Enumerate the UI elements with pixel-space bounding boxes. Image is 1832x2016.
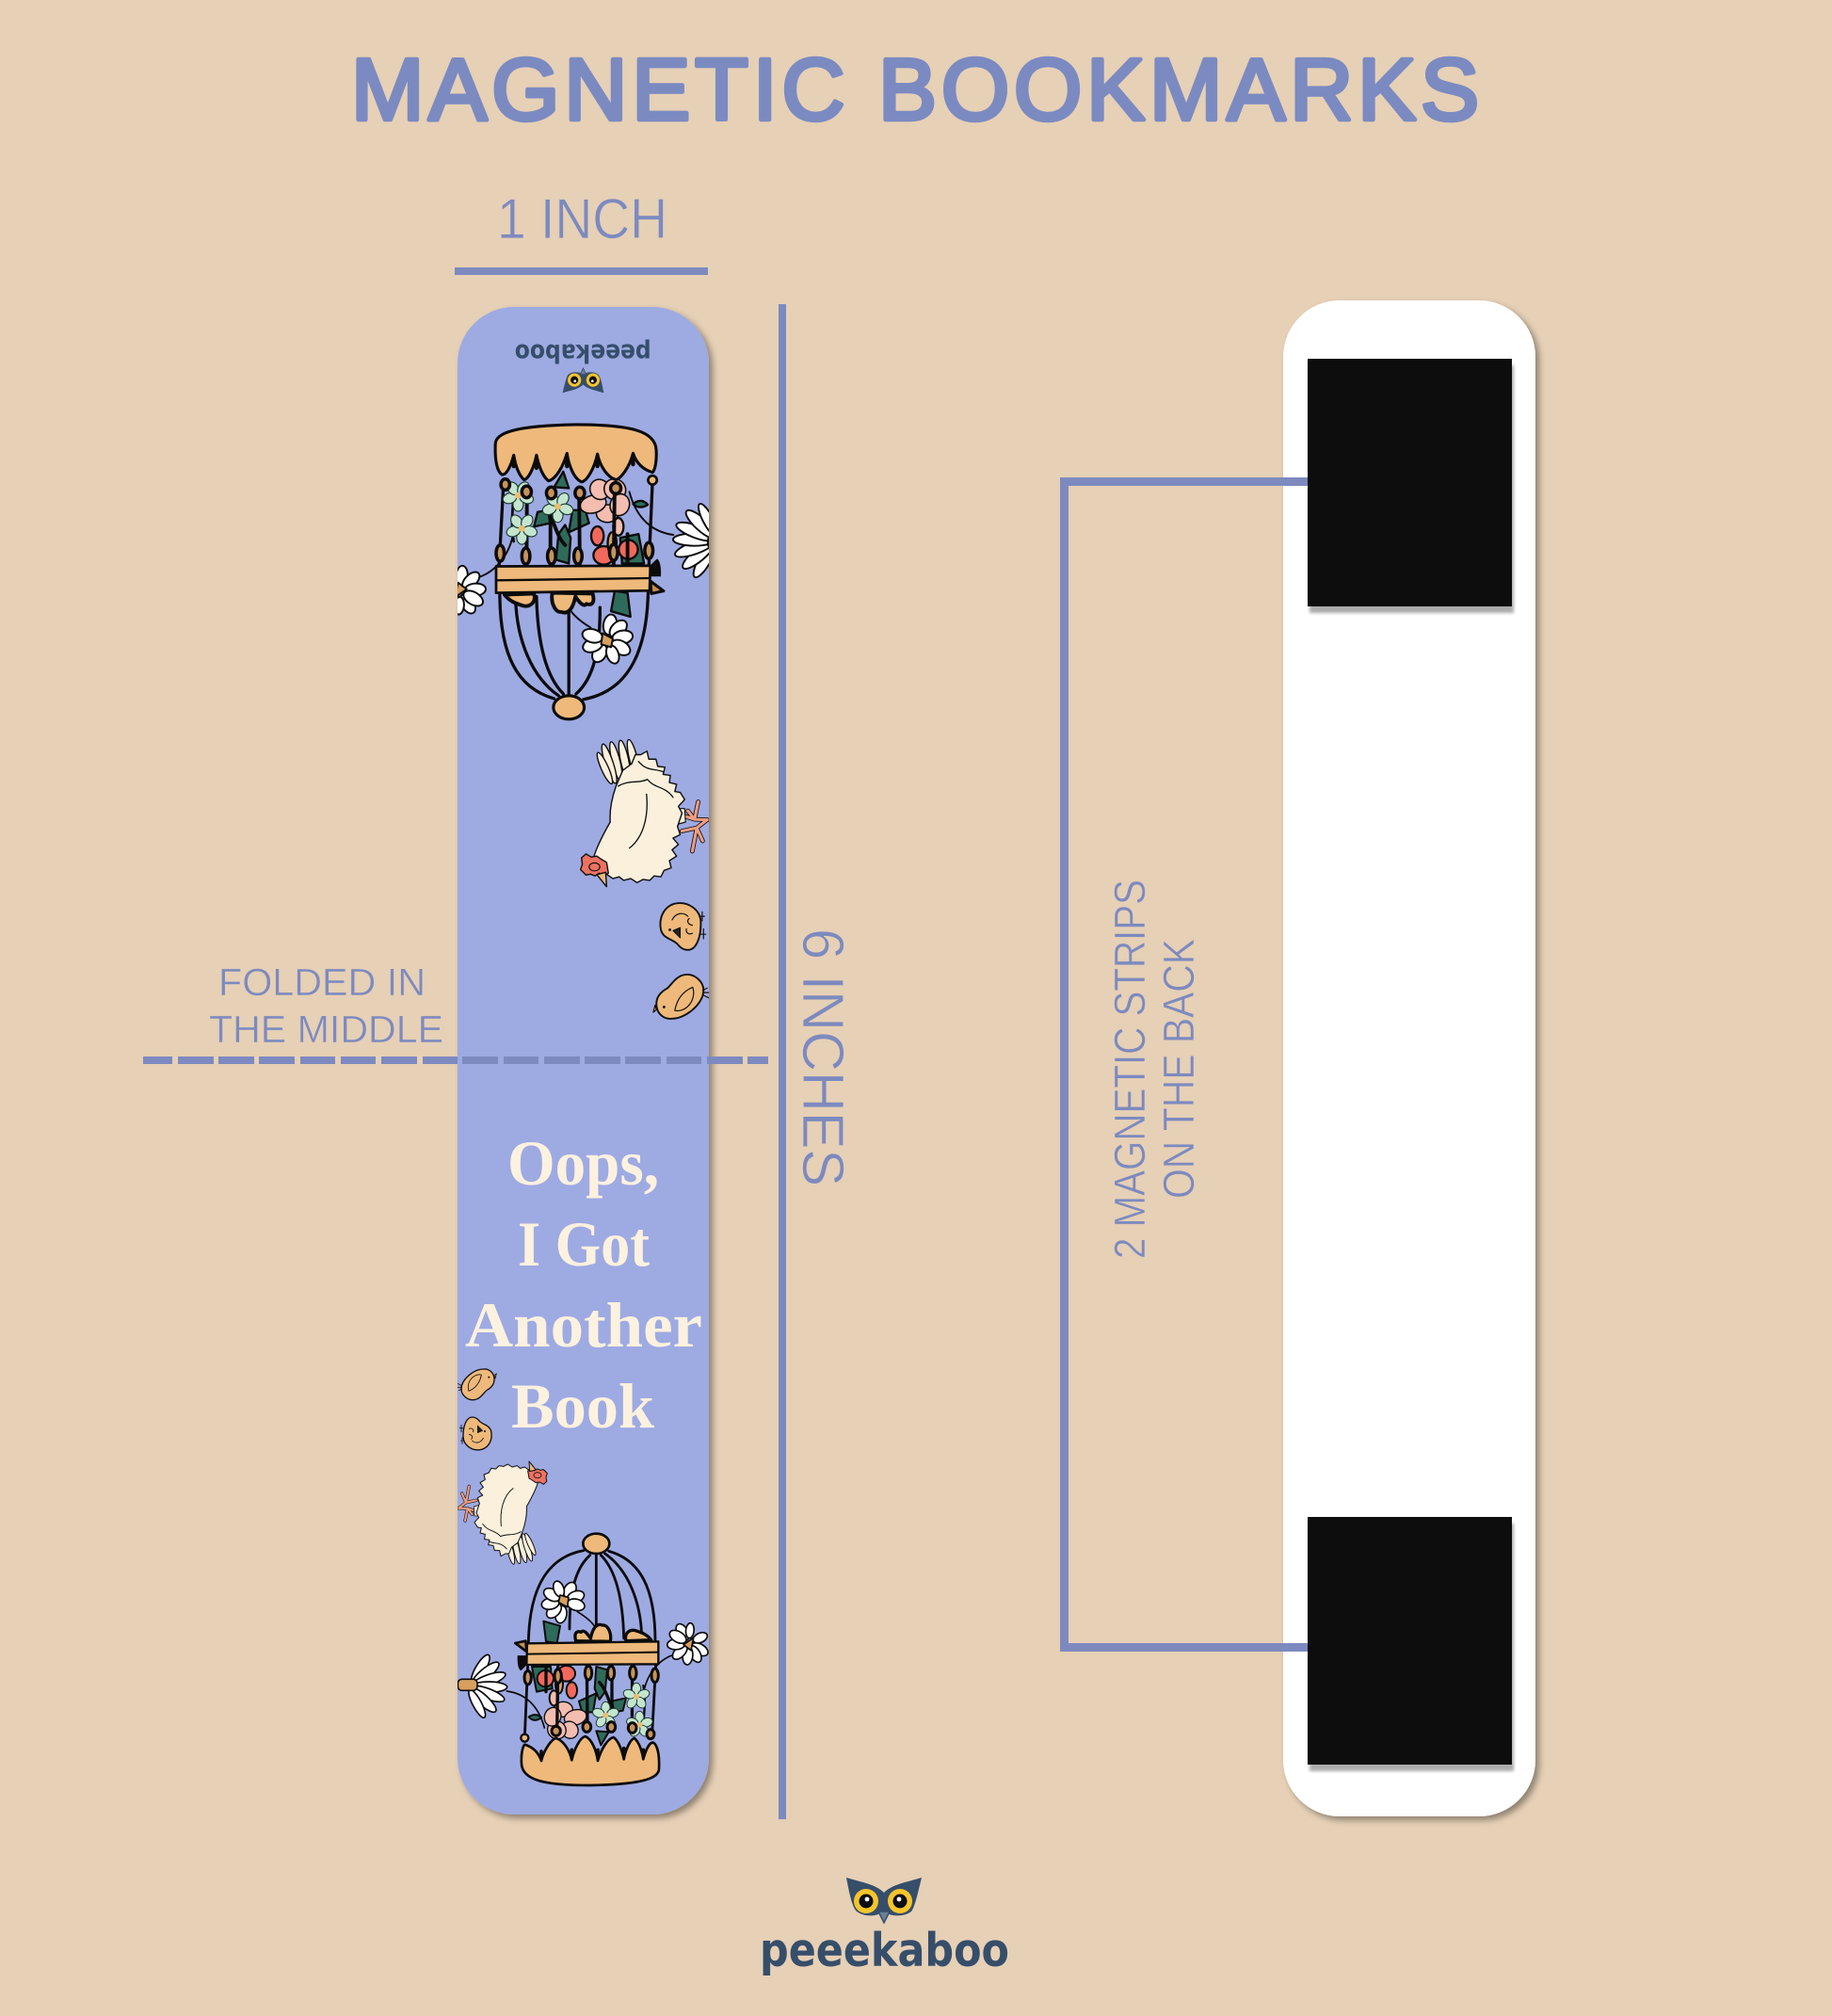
magnetic strip bottom (1308, 1517, 1512, 1765)
fold label (209, 960, 443, 1051)
magnetic strip top (1308, 359, 1512, 606)
bookmark body (458, 307, 709, 1814)
top hen and chicks (upside down) (581, 738, 709, 1019)
dimension line: 6 inches (779, 304, 786, 1819)
white bookmark back (1283, 300, 1535, 1816)
bookmark quote text: Another (465, 1289, 702, 1361)
connector bracket (1064, 482, 1308, 1648)
bookmark quote text (465, 1127, 702, 1442)
dimension label: 1 inch (455, 187, 708, 275)
bottom hen and chicks (458, 1369, 547, 1565)
illustrated bookmark art (458, 339, 709, 1787)
magnetic strips label: 2 MAGNETIC STRIPS (1105, 879, 1154, 1259)
fold label: THE MIDDLE (209, 1008, 443, 1051)
bookmark quote text: I Got (518, 1208, 650, 1280)
magnetic strips label (1105, 879, 1203, 1259)
top cage illustration (upside down) (436, 425, 731, 719)
bookmark quote text: Book (511, 1370, 654, 1442)
panel: bookmark front (458, 307, 717, 1823)
bottom cage illustration (458, 1534, 710, 1785)
dashed fold line (143, 1056, 768, 1064)
bookmark quote text: Oops, (507, 1127, 659, 1199)
panel: bookmark back (1064, 300, 1535, 1816)
title: MAGNETIC BOOKMARKS (351, 40, 1479, 138)
dimension label: 1 inch: 1 INCH (497, 187, 667, 250)
peekaboo logo (760, 1878, 1009, 1977)
magnetic strips label: ON THE BACK (1154, 939, 1203, 1199)
small upside-down peekaboo logo (515, 338, 651, 393)
dimension label: 6 inches: 6 INCHES (790, 928, 855, 1186)
fold label: FOLDED IN (218, 960, 426, 1004)
